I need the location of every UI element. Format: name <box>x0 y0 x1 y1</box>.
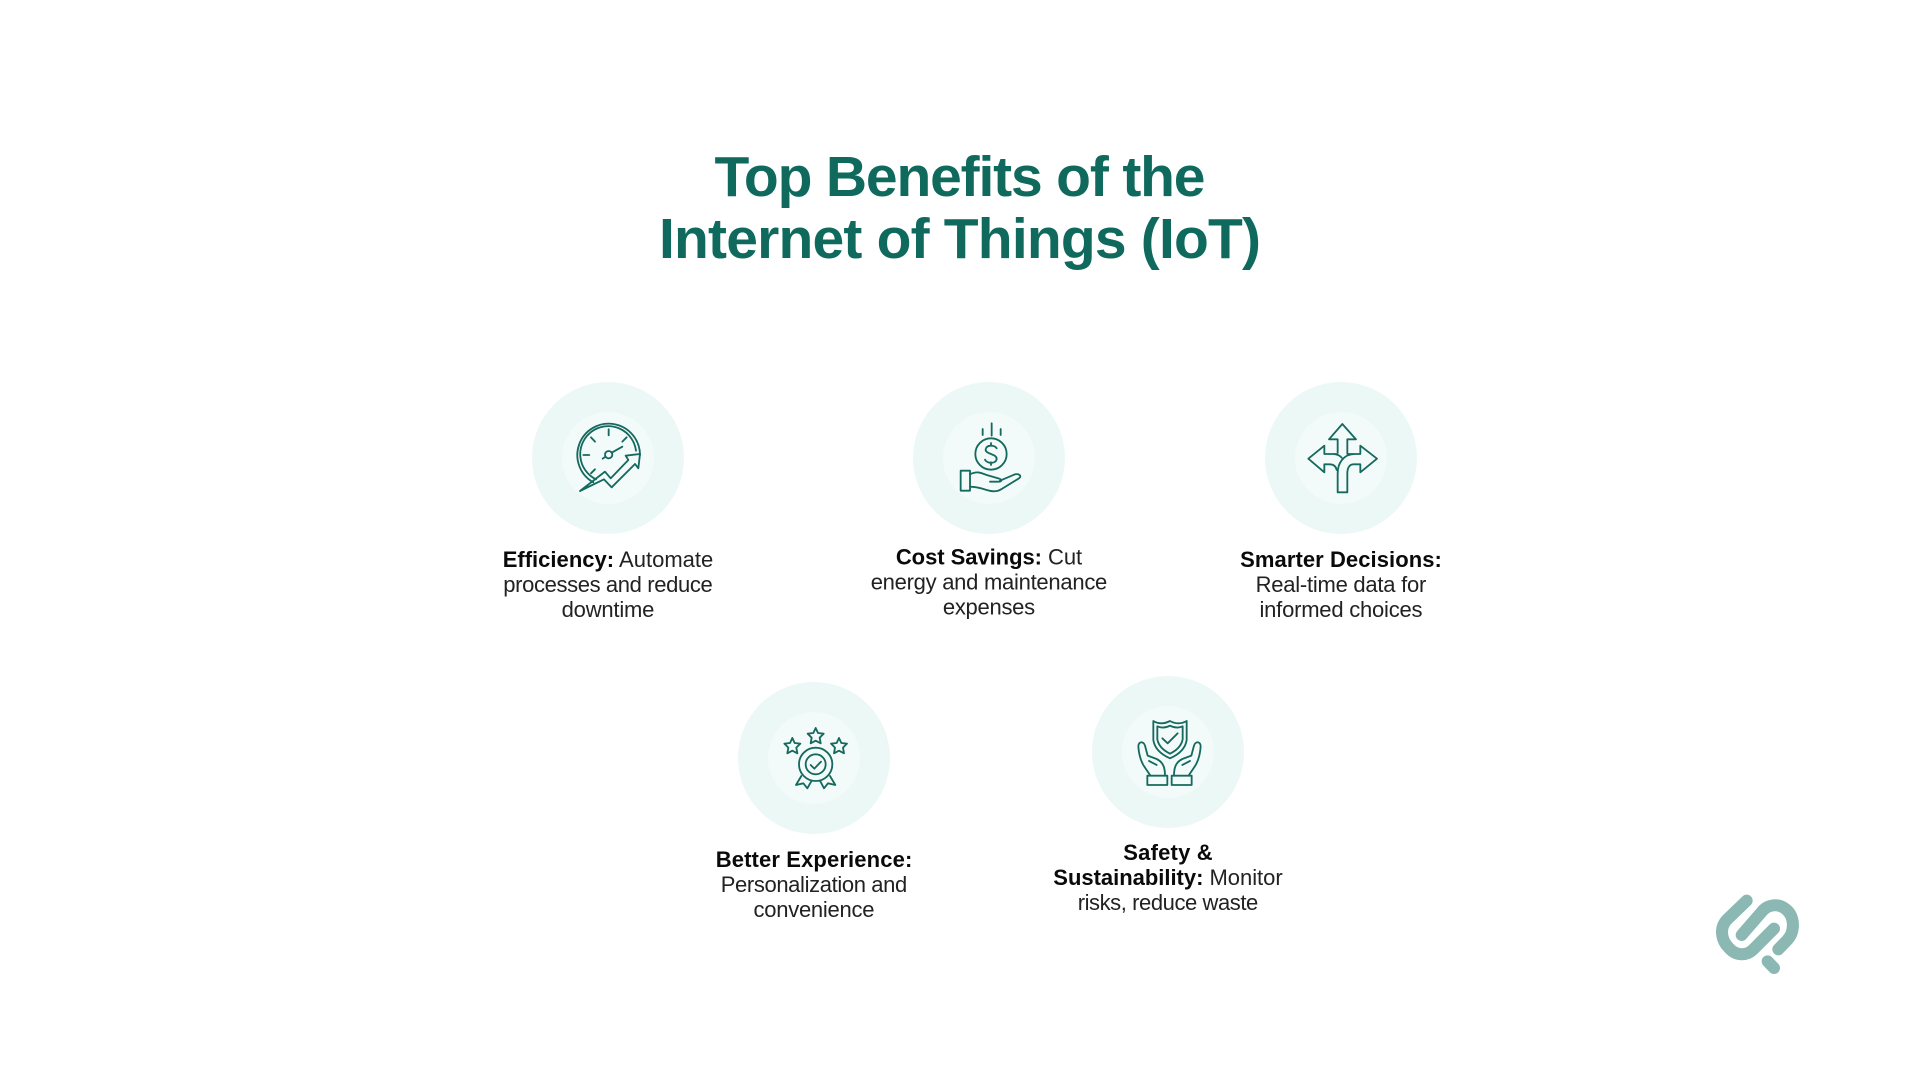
panel: smarter decisions <box>1240 382 1442 622</box>
icon circle: better experience <box>738 682 890 834</box>
icon circle: safety and sustainability <box>1092 676 1244 828</box>
text: better experience: Better Experience: <box>716 847 912 872</box>
icon: speedometer with rising arrow <box>577 424 640 491</box>
panel: safety and sustainability: risks, reduce waste <box>1078 890 1258 915</box>
text: smarter decisions: Smarter Decisions: <box>1240 547 1442 572</box>
panel: smarter decisions: Real-time data for <box>1256 572 1426 597</box>
icon circle: cost savings <box>913 382 1065 534</box>
icon circle: efficiency <box>532 382 684 534</box>
title: Internet of Things (IoT) <box>659 207 1261 271</box>
panel: efficiency: processes and reduce <box>503 572 713 597</box>
logo <box>1722 901 1793 968</box>
panel: efficiency <box>503 382 713 622</box>
panel: smarter decisions: informed choices <box>1260 597 1422 622</box>
icon: hands holding shield <box>1138 721 1201 785</box>
text: efficiency: Efficiency: Automate <box>503 547 713 572</box>
panel: better experience <box>716 682 912 922</box>
panel: cost savings: energy and maintenance <box>871 570 1107 594</box>
icon: hand holding coin <box>961 423 1020 491</box>
title: Top Benefits of the <box>714 145 1206 209</box>
text: safety and sustainability: Safety & <box>1123 840 1213 865</box>
panel: cost savings: expenses <box>943 594 1035 620</box>
icon: award badge with stars <box>784 728 847 788</box>
panel: cost savings <box>871 382 1107 620</box>
icon: three-way arrows <box>1308 424 1377 492</box>
text: cost savings: Cost Savings: Cut <box>896 544 1082 570</box>
panel: better experience: Personalization and <box>721 872 907 897</box>
icon circle: smarter decisions <box>1265 382 1417 534</box>
panel: safety and sustainability <box>1053 676 1283 915</box>
panel: safety and sustainability: Sustainability: Monitor <box>1053 865 1283 890</box>
panel: better experience: convenience <box>754 897 874 922</box>
title <box>659 145 1261 271</box>
panel: efficiency: downtime <box>562 597 654 622</box>
